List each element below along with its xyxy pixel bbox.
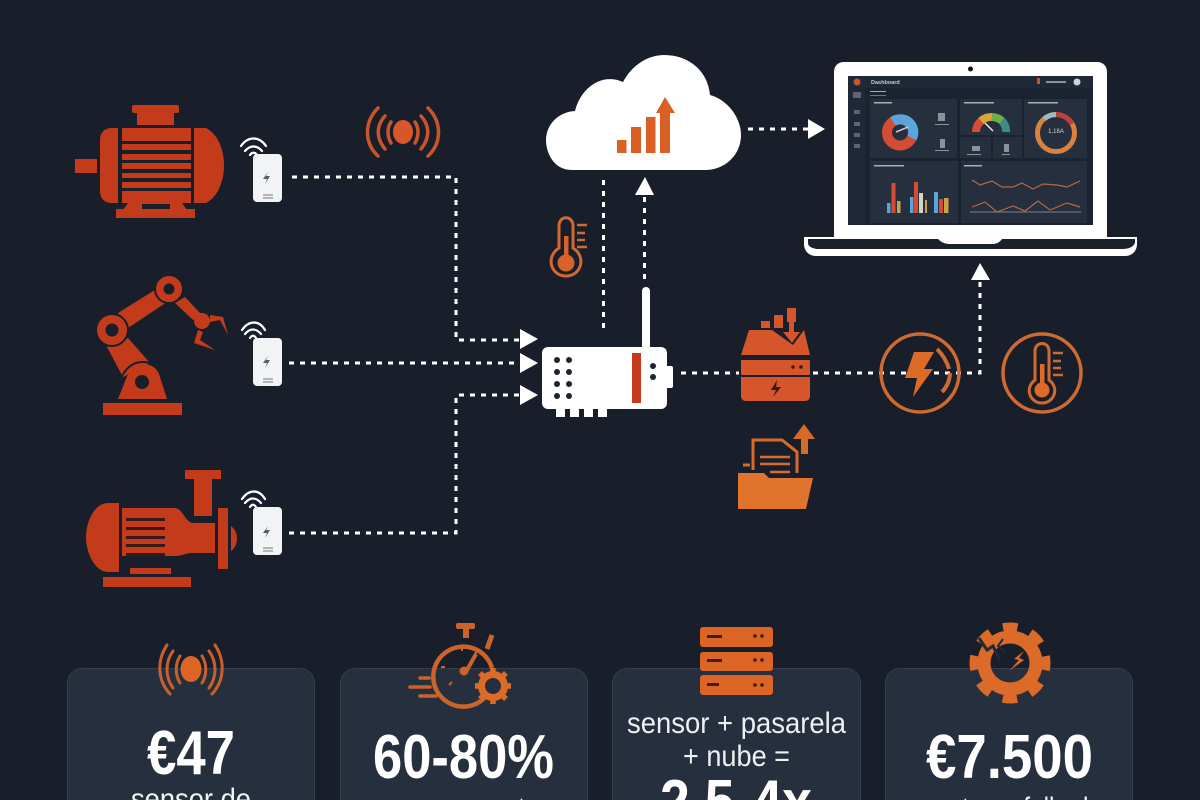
connector: gateway to laptop [681,280,980,373]
stat value: 60-80% [373,723,554,792]
stat caption line 2: + nube = [683,740,790,773]
icon: temperature circle [1003,334,1081,412]
dashboard title: Dashboard [871,80,900,86]
icon: sensor 1 with wifi [241,138,282,202]
stat card 1 [68,645,314,800]
connector: sensor 2 to gateway [289,362,522,364]
ring value: 1,18A [1048,129,1064,135]
ring chart [1038,114,1074,152]
connector: cloud to laptop [748,128,810,130]
arrowhead: input 2 [520,353,538,373]
icon: electric motor [75,105,224,218]
stat caption: sensor + pasarela [627,707,846,740]
connector: sensor 3 to gateway [289,395,522,533]
icon: sensor 2 with wifi [242,322,282,386]
stat value: €47 [147,719,235,788]
arrowhead: to laptop [808,119,825,139]
bar chart [887,182,948,213]
icon: thermometer [551,218,587,276]
connector: cloud down to gateway [602,180,605,332]
connector: sensor 1 to gateway [292,177,522,340]
stat value: €7.500 [926,723,1093,792]
icon: edge server [739,308,812,403]
donut chart [887,119,913,146]
icon: water pump [86,470,237,587]
icon: damaged gear [974,627,1046,699]
icon: folder with upload [738,424,815,509]
arrowhead: to cloud [635,177,654,195]
connector: gateway up to cloud [643,197,646,285]
laptop body [804,62,1137,256]
icon: server stack [700,627,773,695]
gauge chart [976,117,1006,132]
icon: cloud with chart [546,55,741,170]
arrowhead: input 3 [520,385,538,405]
icon: robot arm [96,275,228,415]
icon: gateway router [542,287,673,417]
icon: stopwatch with gear [410,623,511,707]
arrowhead: input 1 [520,329,538,349]
icon: vibration signal [368,108,438,156]
stat card 3 [612,627,860,800]
icon: sensor 3 with wifi [242,492,282,555]
arrowhead: up to laptop [971,263,990,280]
icon: energy circle [881,334,959,412]
stat card 2 [340,623,588,800]
laptop with dashboard [804,62,1137,256]
stat card 4 [886,627,1132,800]
line chart [970,180,1081,212]
icon: vibration [160,645,222,694]
dashboard screen [848,76,1093,225]
